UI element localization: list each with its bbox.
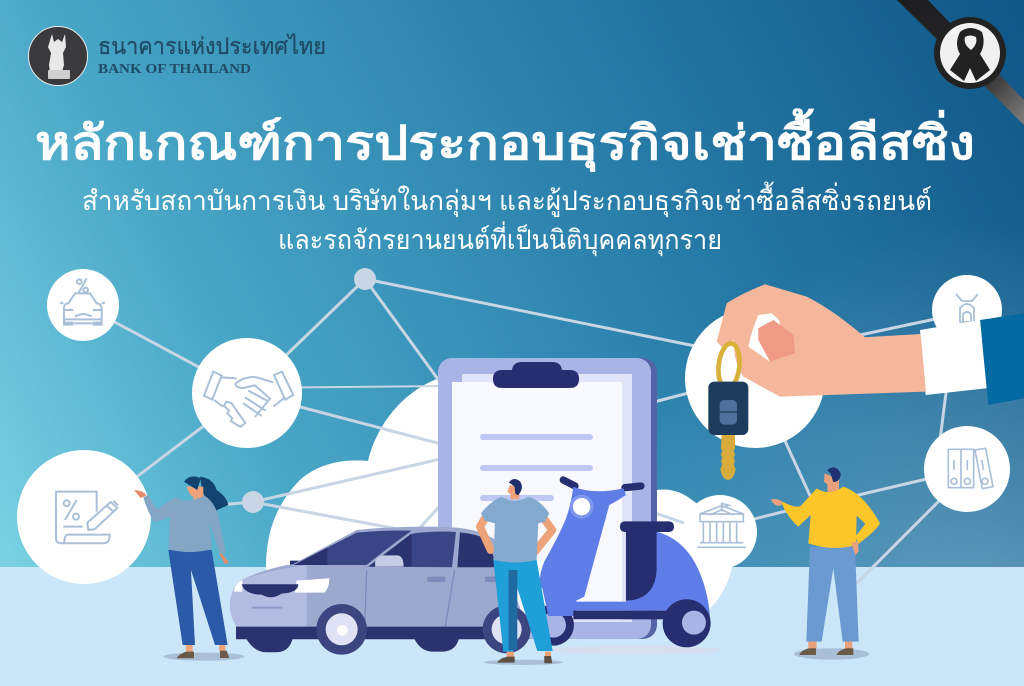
network connector lines: [83, 279, 947, 585]
hand: [717, 284, 926, 397]
key fob: [708, 382, 748, 435]
woman: [134, 476, 245, 661]
icon circle: bank building: [683, 495, 757, 569]
man in yellow sweater: [771, 467, 880, 660]
logo English name: BANK OF THAILAND: [98, 61, 251, 76]
icon circle: binders: [924, 426, 1010, 512]
clipboard text lines: [480, 434, 593, 501]
scooter: [533, 480, 720, 654]
car key: [708, 342, 748, 480]
icon circle: handshake: [192, 338, 302, 448]
icon circle: car loan: [47, 269, 119, 341]
suit sleeve: [980, 313, 1024, 405]
ground: [0, 567, 1024, 686]
icon circle: percent document: [17, 450, 151, 584]
car: [230, 527, 531, 655]
logo Thai name: ธนาคารแห่งประเทศไทย: [98, 33, 326, 59]
subtitle: และรถจักรยานยนต์ที่เป็นนิติบุคคลทุกราย: [278, 221, 722, 257]
key ring: [716, 342, 742, 390]
subtitle: [82, 181, 932, 257]
cloud backdrop: [266, 376, 735, 612]
logo emblem: [28, 26, 88, 86]
shirt cuff: [920, 320, 987, 395]
title: หลักเกณฑ์การประกอบธุรกิจเช่าซื้อลีสซิ่ง: [35, 108, 975, 172]
subtitle: สำหรับสถาบันการเงิน บริษัทในกลุ่มฯ และผู้ประกอบธุรกิจเช่าซื้อลีสซิ่งรถยนต์: [82, 181, 932, 218]
network node dots: [242, 268, 376, 513]
clipboard: [438, 358, 657, 639]
hand holding car key: [717, 284, 1024, 405]
logo: Bank of Thailand: [28, 26, 326, 86]
mourning ribbon band and badge: [897, 0, 1024, 125]
icon circle: key holder backdrop: [685, 308, 825, 448]
icon circle: scooter: [932, 275, 1002, 345]
man in blue shirt: [480, 479, 563, 665]
key blade: [720, 433, 736, 480]
gap between fingers: [748, 313, 780, 362]
palm shade: [758, 320, 795, 362]
clipboard clip: [493, 362, 579, 388]
